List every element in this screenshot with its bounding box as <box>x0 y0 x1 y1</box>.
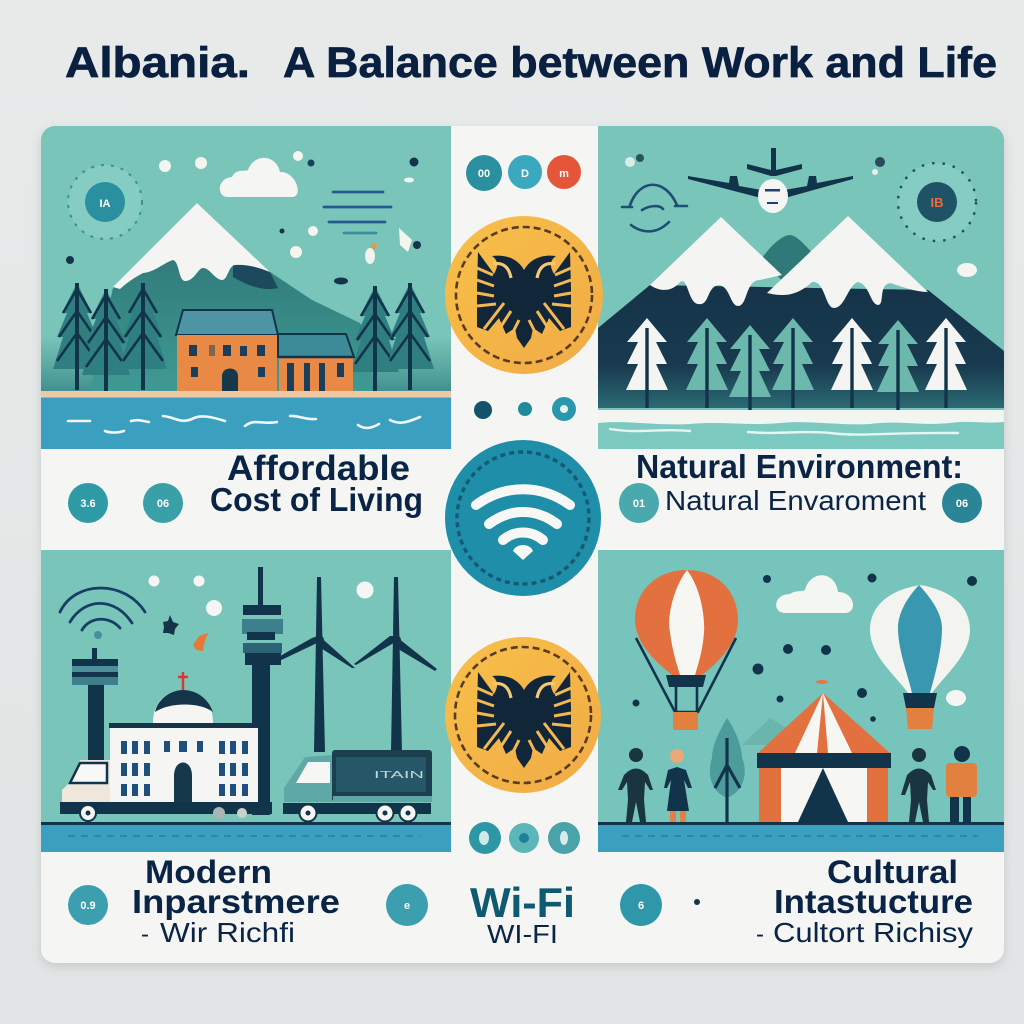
panel: cultural richness <box>598 550 1004 948</box>
small badge <box>620 884 700 926</box>
panel label: Wir Richfi <box>160 917 295 948</box>
icon: circular badge: IA <box>100 198 111 210</box>
panel label <box>210 449 423 518</box>
wi-fi label <box>470 879 575 949</box>
people <box>618 746 977 822</box>
road <box>41 822 451 852</box>
small badges: e <box>404 900 410 912</box>
small badges: 01 <box>633 498 645 510</box>
icon: circular badge: IB <box>930 195 944 210</box>
orange house <box>176 310 354 391</box>
panel label: Cultural <box>827 854 958 890</box>
panel: modern infrastructure <box>41 550 451 948</box>
panel label <box>638 454 960 510</box>
panel label: Modern <box>145 854 272 890</box>
scattered shapes <box>625 154 977 277</box>
right truck: ITAIN <box>374 770 424 781</box>
small badge: 6 <box>638 900 644 912</box>
domed building <box>109 672 258 802</box>
icon: cloud <box>776 575 853 613</box>
panel label: - <box>141 921 149 948</box>
center column top badges: m <box>559 168 569 180</box>
panel: natural environment <box>598 126 1004 523</box>
panel label: Cost of Living <box>210 481 423 518</box>
eagle emblem top <box>445 216 603 374</box>
icon: circular badge <box>898 163 976 241</box>
panel label: Affordable <box>227 449 410 488</box>
fir trees <box>626 318 967 415</box>
icon: cloud <box>220 158 298 197</box>
river <box>598 410 1004 436</box>
wind turbines <box>273 577 437 752</box>
scattered shapes <box>632 574 977 722</box>
circus tent <box>757 693 891 822</box>
eagle emblem bottom <box>445 637 601 793</box>
trees <box>53 283 434 396</box>
center column top badges <box>466 155 581 191</box>
center column top badges: 00 <box>478 168 490 180</box>
small badges <box>619 483 982 523</box>
white and blue balloon <box>870 585 970 729</box>
small badges <box>68 884 428 926</box>
mountains <box>598 216 1004 408</box>
center column bottom badges <box>469 822 580 854</box>
panel label: - <box>756 921 764 948</box>
small badges: 06 <box>157 498 169 510</box>
small badges: 3.6 <box>80 498 96 510</box>
card shadow <box>41 130 1004 967</box>
distant peak <box>763 235 811 280</box>
small badges: 06 <box>956 498 968 510</box>
right truck <box>283 750 432 822</box>
wifi signal <box>60 588 145 639</box>
panel label: Natural Envaroment <box>665 485 926 516</box>
scattered shapes <box>66 151 421 284</box>
wifi emblem <box>445 440 601 596</box>
panel label: Inparstmere <box>132 883 340 920</box>
arcs <box>622 185 687 231</box>
panel label <box>756 854 973 948</box>
tree <box>710 718 745 822</box>
plane <box>688 148 853 213</box>
left truck <box>60 760 272 821</box>
orange balloon <box>635 570 738 730</box>
left tower <box>72 648 118 765</box>
icon: horizontal lines <box>324 192 391 233</box>
sand strip <box>41 391 451 397</box>
ground <box>598 822 1004 852</box>
panel label: Natural Environment: <box>636 448 963 485</box>
title: Albania. <box>65 39 250 87</box>
center column dots <box>474 397 576 421</box>
title: A Balance between Work and Life <box>283 39 997 87</box>
wi-fi label: Wi-Fi <box>470 879 575 926</box>
scattered stars <box>148 576 374 651</box>
card <box>41 126 1004 963</box>
mountain <box>90 203 372 392</box>
panel label: Cultort Richisy <box>773 917 973 948</box>
center tower <box>242 567 283 815</box>
small badges <box>68 483 183 523</box>
panel label <box>134 860 339 942</box>
sea with waves <box>41 398 451 449</box>
small badges: 0.9 <box>80 900 96 912</box>
faint hill <box>742 718 800 745</box>
wi-fi label: WI-FI <box>487 919 558 949</box>
panel label: Intastucture <box>774 883 973 920</box>
icon: circular badge <box>68 165 142 239</box>
center column top badges: D <box>521 168 529 180</box>
panel: affordable cost of living <box>41 126 451 523</box>
